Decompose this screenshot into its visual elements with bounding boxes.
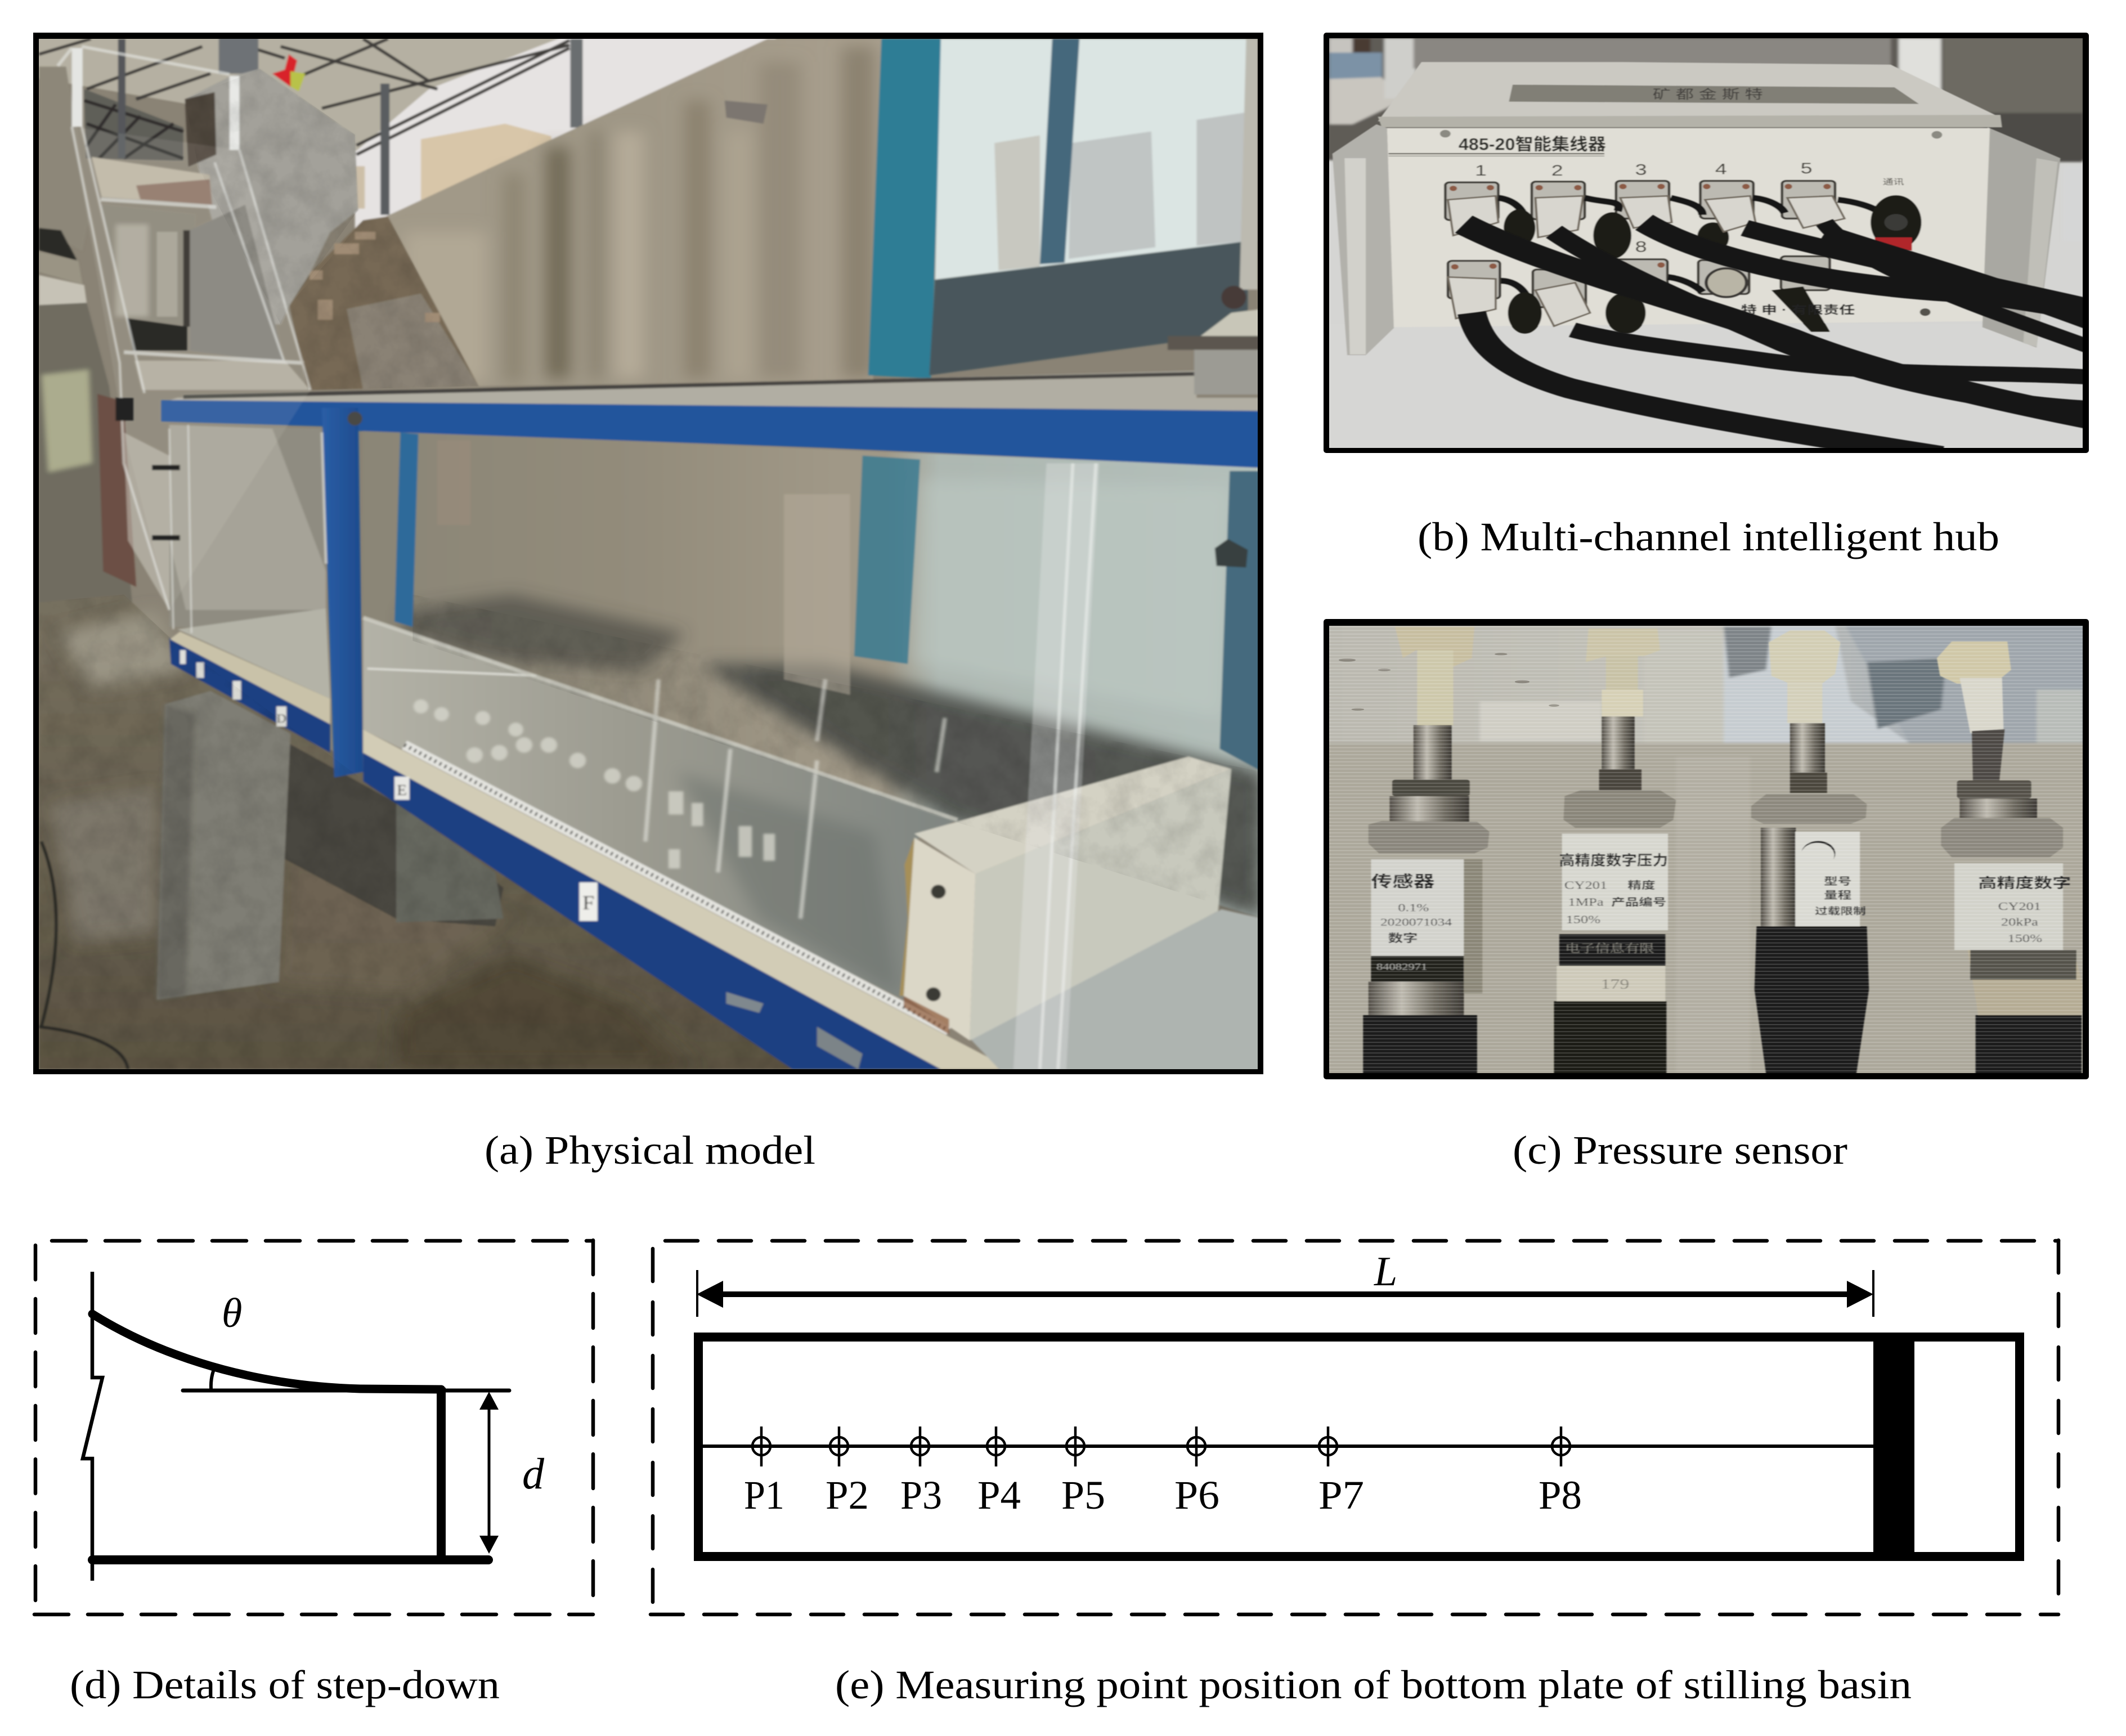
- dashed frame d: [34, 1240, 593, 1614]
- point labels: P7: [1318, 1473, 1364, 1518]
- panel: multi-channel intelligent hub photo: 485-20智能集线器: [1459, 134, 1606, 154]
- panel: multi-channel intelligent hub photo: 2: [1551, 162, 1563, 179]
- sensor 4: CY201: [1998, 900, 2041, 913]
- sensor 2: 电子信息有限: [1565, 943, 1654, 955]
- point labels: P6: [1174, 1473, 1219, 1518]
- basin outline: [698, 1337, 2020, 1556]
- panel: multi-channel intelligent hub photo: 1: [1475, 162, 1487, 179]
- sensor 2: 150%: [1566, 914, 1600, 926]
- caption: pressure sensor: (c) Pressure sensor: [1513, 1128, 1847, 1173]
- step profile: [83, 1272, 102, 1581]
- arrow: d dimension: [479, 1392, 499, 1554]
- panel: details of step-down diagram: [34, 1240, 593, 1614]
- caption: physical model: (a) Physical model: [485, 1128, 815, 1173]
- panel: physical model photo: D: [277, 712, 286, 725]
- panel: physical model photo: E: [397, 782, 407, 799]
- sensor 4: 150%: [2008, 932, 2042, 945]
- sensor 1: [1363, 626, 1490, 1074]
- end sill: [1873, 1333, 1914, 1561]
- sensor 1: 2020071034: [1380, 916, 1452, 928]
- sensor 2: 179: [1600, 976, 1629, 992]
- sensor 4: 20kPa: [2001, 916, 2038, 928]
- sensor 1: 84082971: [1376, 962, 1427, 972]
- sensor 2: 精度: [1628, 880, 1655, 891]
- caption: measuring point position: (e) Measuring point position of bottom plate of stilling basin: [835, 1662, 1912, 1707]
- angle arc: [211, 1366, 216, 1389]
- sensor 3: 型号: [1824, 876, 1851, 887]
- label d: d: [522, 1449, 545, 1498]
- panel: multi-channel intelligent hub photo: 5: [1801, 159, 1813, 177]
- curved step surface: [92, 1314, 441, 1389]
- sensor 3: [1751, 630, 1869, 1074]
- sensor 2: 高精度数字压力: [1559, 853, 1668, 868]
- label theta: θ: [222, 1290, 242, 1336]
- caption: multi-channel intelligent hub: (b) Multi-channel intelligent hub: [1418, 514, 1999, 559]
- sensor 4: [1937, 642, 2083, 1074]
- caption: details of step-down: (d) Details of step-down: [70, 1662, 500, 1707]
- panel: multi-channel intelligent hub photo: 通讯: [1883, 178, 1904, 186]
- sensor 1: 0.1%: [1398, 902, 1429, 914]
- label L: L: [1374, 1249, 1397, 1295]
- horizontal reference line: [183, 1389, 509, 1392]
- panel: multi-channel intelligent hub photo: 4: [1715, 160, 1727, 177]
- point labels: P8: [1539, 1473, 1582, 1518]
- sensor 1: 传感器: [1371, 873, 1434, 891]
- centre line: [698, 1445, 1873, 1448]
- point labels: [744, 1473, 1582, 1518]
- panel: measuring point diagram: [651, 1240, 2058, 1614]
- arrow: L dimension: [697, 1281, 1873, 1308]
- panel: multi-channel intelligent hub photo: 矿 都 金 斯 特: [1653, 87, 1763, 101]
- point labels: P2: [826, 1473, 869, 1518]
- sensor 2: 产品编号: [1611, 896, 1666, 908]
- panel: physical model photo: F: [582, 891, 594, 914]
- sensor 1: 数字: [1388, 932, 1418, 944]
- sensor 2: [1554, 629, 1676, 1074]
- sensor 2: 1MPa: [1568, 896, 1604, 909]
- point labels: P4: [977, 1473, 1021, 1518]
- point labels: P3: [900, 1473, 942, 1518]
- sensor 4: 高精度数字: [1978, 876, 2071, 891]
- panel: multi-channel intelligent hub photo: 8: [1635, 238, 1647, 255]
- floor: [92, 1555, 488, 1564]
- sensor 3: 过载限制: [1815, 906, 1866, 917]
- measuring points: [752, 1427, 1570, 1466]
- panel: physical model photo: [33, 31, 1271, 1081]
- dashed frame e: [651, 1240, 2058, 1614]
- sensor 2: CY201: [1564, 880, 1607, 892]
- panel: pressure sensor photo: [1324, 619, 2089, 1079]
- point labels: P5: [1061, 1473, 1105, 1518]
- point labels: P1: [744, 1473, 784, 1518]
- panel: multi-channel intelligent hub photo: 特 申 · 有限责任: [1741, 303, 1855, 316]
- panel: multi-channel intelligent hub photo: [1324, 33, 2089, 456]
- dimension L ticks: [697, 1270, 1873, 1317]
- sensor 3: 量程: [1824, 889, 1851, 901]
- vertical drop wall: [437, 1388, 446, 1560]
- panel: multi-channel intelligent hub photo: 3: [1635, 161, 1647, 178]
